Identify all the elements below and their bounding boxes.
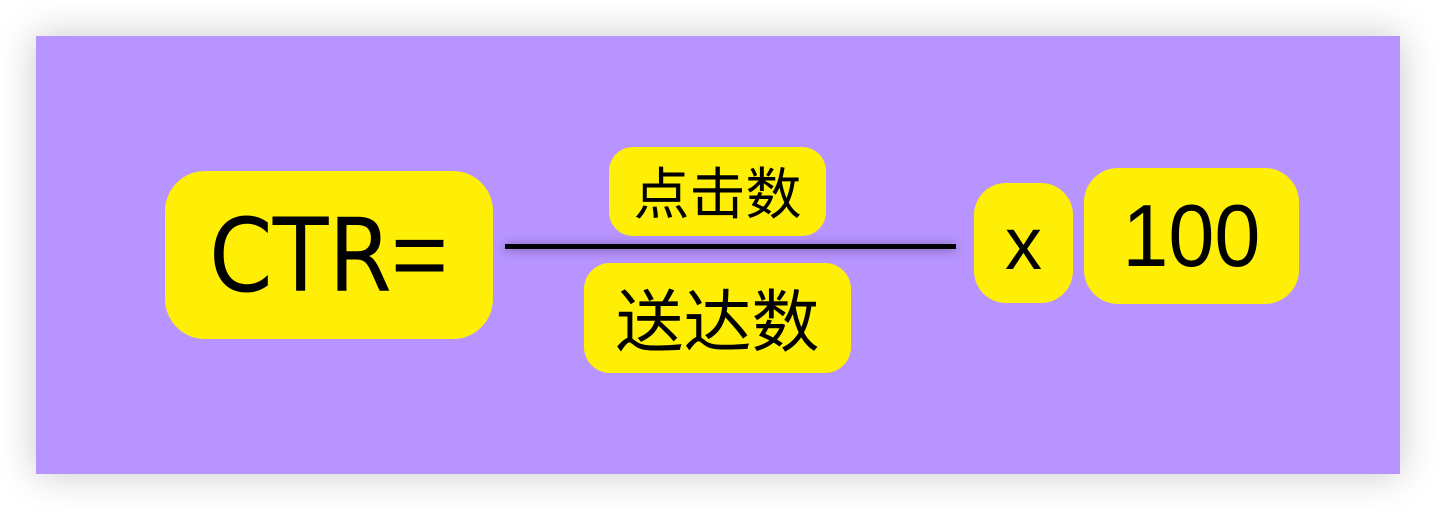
label: denominator delivered: 送达数 [615,284,820,360]
label: 100 [1084,168,1299,304]
label: multiply sign [974,183,1073,303]
fraction line [505,244,956,249]
label: CTR=: = [391,199,448,309]
label: numerator clicks [609,147,826,236]
label: 100: 100 [1122,186,1261,285]
label: CTR= [165,171,493,339]
label: multiply sign: x [1005,202,1042,284]
label: denominator delivered [584,263,851,373]
label: CTR=: CTR [209,197,392,316]
label: numerator clicks: 点击数 [634,163,802,226]
